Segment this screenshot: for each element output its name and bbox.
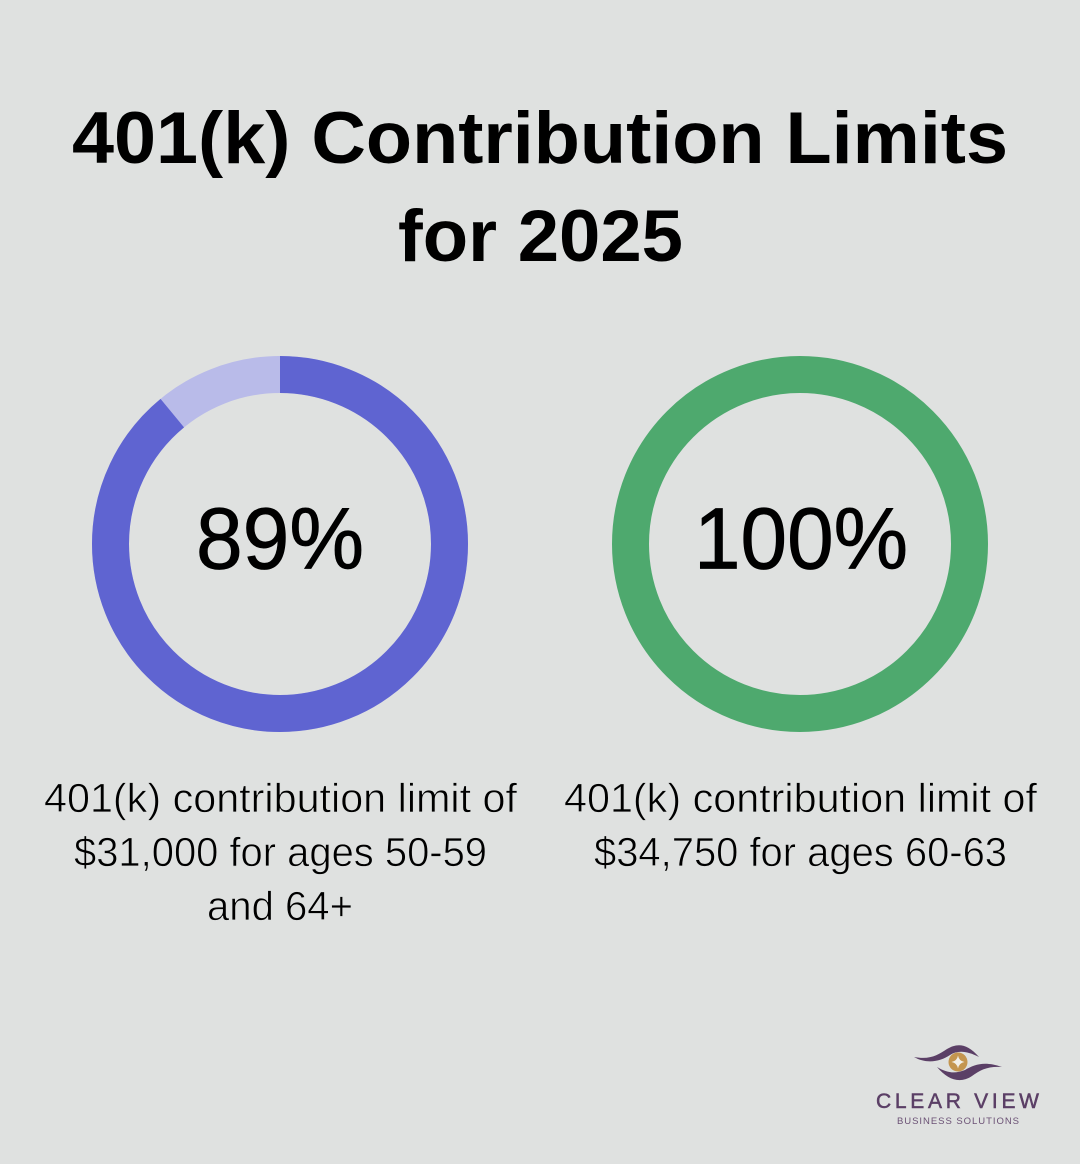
caption: ages 50-59 and 64+: 401(k) contribution limit of [44, 775, 518, 821]
value: 89%: 89% [196, 490, 364, 588]
icon: eye with star [914, 1045, 1002, 1080]
tagline: BUSINESS SOLUTIONS [897, 1116, 1019, 1127]
panel: 100 percent stat [564, 374, 1038, 875]
title: for 2025 [398, 196, 683, 277]
panel: 89 percent stat [44, 374, 518, 929]
title: 401(k) Contribution Limits [72, 98, 1008, 179]
wordmark: CLEAR VIEW [876, 1090, 1039, 1113]
donut chart: 89% [110, 374, 450, 714]
caption: ages 50-59 and 64+ [44, 775, 518, 929]
value: 100%: 100% [694, 490, 908, 588]
donut chart: 100% [630, 374, 970, 714]
caption: ages 50-59 and 64+: and 64+ [207, 883, 353, 929]
caption: ages 60-63: 401(k) contribution limit of [564, 775, 1038, 821]
logo: Clear View Business Solutions [876, 1045, 1039, 1127]
title [72, 98, 1008, 277]
caption: ages 60-63: $34,750 for ages 60-63 [594, 829, 1007, 875]
caption: ages 60-63 [564, 775, 1038, 875]
caption: ages 50-59 and 64+: $31,000 for ages 50-59 [74, 829, 487, 875]
